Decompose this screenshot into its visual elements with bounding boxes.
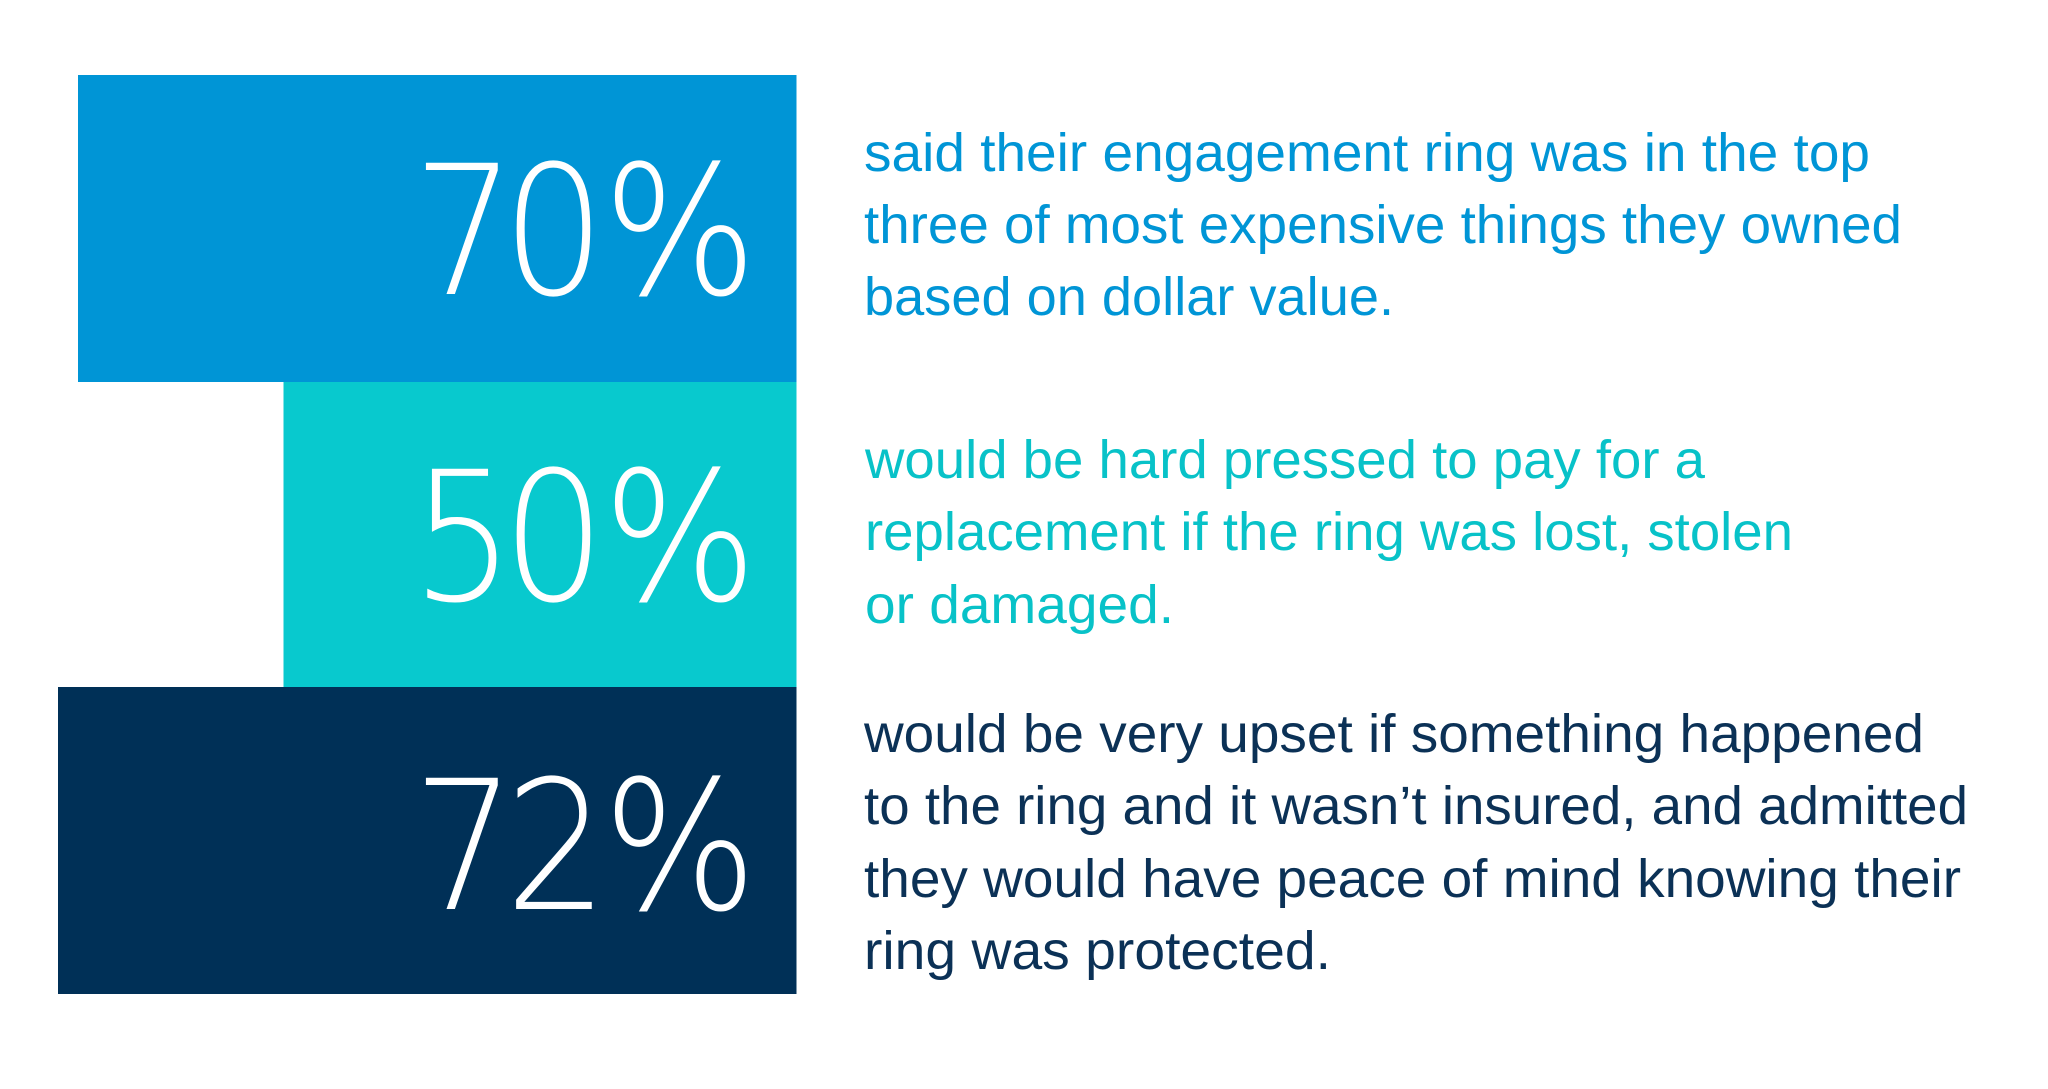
text block: 50% description: replacement if the ring was lost, stolen <box>865 502 1793 562</box>
text block: 72% description: ring was protected. <box>864 921 1331 981</box>
text block: 72% description: would be very upset if something happened <box>863 704 1924 764</box>
number: 50%: 50% <box>411 434 757 643</box>
text block: 70% description: three of most expensive things they owned <box>864 195 1902 255</box>
text block: 50% description: or damaged. <box>865 575 1174 635</box>
panel: 70% stat bar <box>78 75 796 382</box>
number: 72%: 72% <box>413 743 757 952</box>
text block: 70% description: based on dollar value. <box>864 267 1394 327</box>
text block: 70% description: said their engagement ring was in the top <box>864 123 1870 183</box>
text block: 72% description <box>863 704 1968 981</box>
text block: 50% description: would be hard pressed to pay for a <box>864 430 1706 490</box>
number: 70%: 70% <box>413 128 757 337</box>
text block: 70% description <box>864 123 1902 327</box>
panel: 72% stat bar <box>58 687 796 994</box>
panel: 50% stat bar <box>284 382 796 687</box>
text block: 50% description <box>864 430 1793 635</box>
text block: 72% description: to the ring and it wasn’t insured, and admitted <box>864 776 1968 836</box>
text block: 72% description: they would have peace of mind knowing their <box>864 849 1961 909</box>
